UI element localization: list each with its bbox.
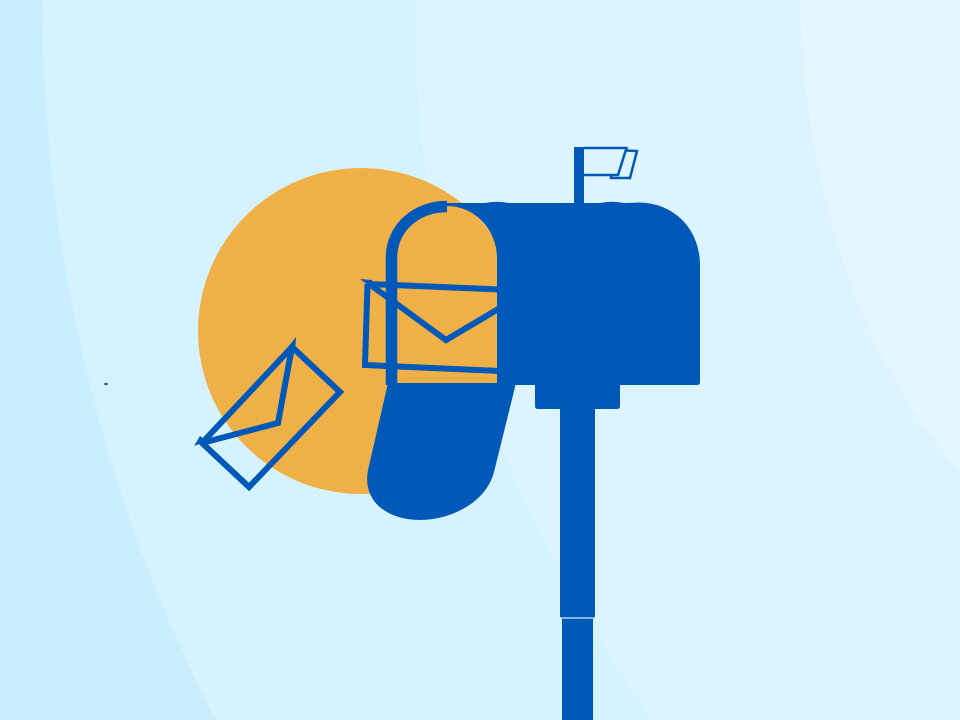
mailbox post xyxy=(560,405,595,720)
small dot xyxy=(104,383,108,385)
envelope inside mailbox xyxy=(360,279,500,371)
orange sun circle xyxy=(198,168,524,494)
flag xyxy=(574,147,637,203)
flying envelope xyxy=(194,337,340,487)
mailbox body xyxy=(392,202,700,409)
door outline arch xyxy=(392,206,447,385)
mailbox door flap xyxy=(367,383,516,520)
